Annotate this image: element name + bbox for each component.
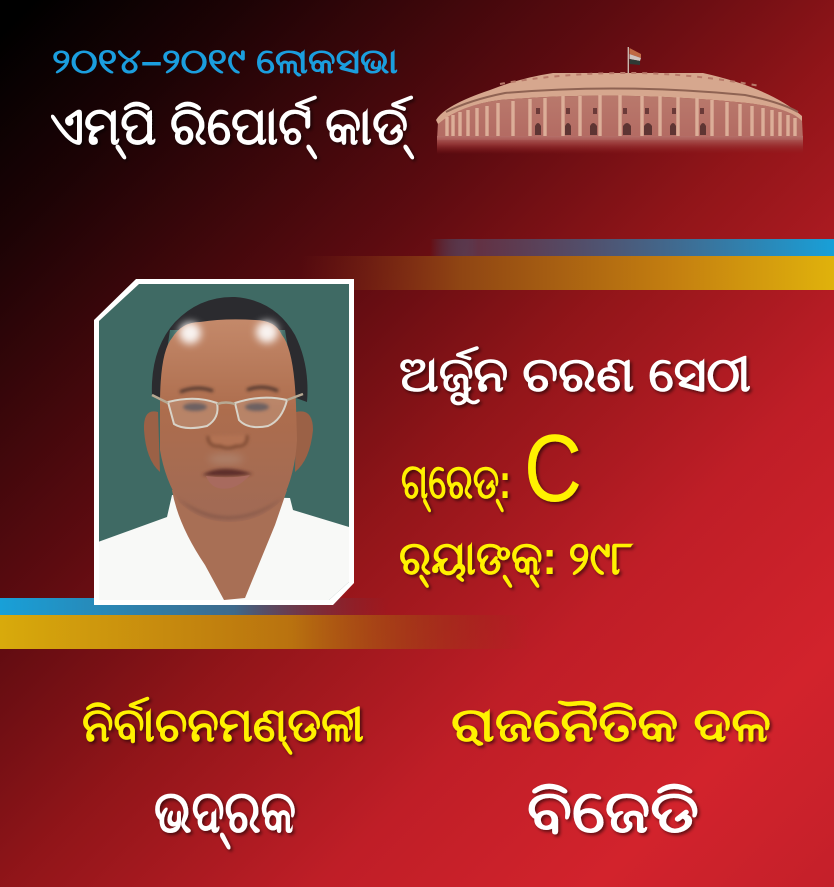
roof	[436, 73, 802, 124]
glasses	[168, 398, 287, 428]
stripe: top gold band	[300, 256, 834, 290]
title: MP report card: ଏମ୍‌ପି ରିପୋର୍ଟ୍ କାର୍ଡ୍	[50, 95, 414, 160]
arched windows	[535, 123, 706, 135]
text: rank: ର୍‍ୟାଙ୍କ୍: ୨୯୮	[399, 531, 634, 588]
text: party label: ରାଜନୈତିକ ଦଳ	[451, 699, 771, 752]
grade value: C	[524, 415, 582, 522]
wall	[437, 96, 803, 140]
small windows	[536, 108, 704, 114]
text: constituency value: ଭଦ୍ରକ	[154, 778, 296, 849]
eyes	[183, 403, 207, 411]
face	[160, 319, 297, 490]
mouth	[202, 469, 253, 476]
photo background	[99, 284, 349, 600]
white kurta	[98, 495, 349, 600]
grade label: ଗ୍ରେଡ୍:	[401, 455, 511, 512]
photo frame	[94, 279, 354, 605]
photo: MP portrait	[94, 279, 354, 605]
text: MP name: ଅର୍ଜୁନ ଚରଣ ସେଠୀ	[399, 346, 751, 405]
eyebrows	[180, 388, 213, 392]
stripe: top blue band	[430, 239, 834, 256]
hair	[152, 297, 308, 402]
stripe: bottom blue band	[0, 598, 390, 615]
neck	[172, 490, 287, 600]
icon: flag	[628, 47, 641, 73]
plinth	[437, 136, 803, 154]
heading: term and Lok Sabha: ୨୦୧୪–୨୦୧୯ ଲୋକସଭା	[52, 42, 398, 81]
nose	[208, 435, 247, 448]
text: constituency label: ନିର୍ବାଚନମଣ୍ଡଳୀ	[82, 697, 364, 755]
forehead highlights	[179, 322, 201, 344]
moustache shadow	[208, 454, 244, 464]
ears	[144, 411, 160, 472]
stripe: bottom gold band	[0, 615, 530, 649]
text: grade	[401, 415, 582, 522]
colonnade	[447, 95, 795, 136]
illustration: parliament building	[436, 47, 803, 154]
jaw shadow	[185, 504, 273, 520]
text: party value: ବିଜେଡି	[527, 778, 699, 845]
